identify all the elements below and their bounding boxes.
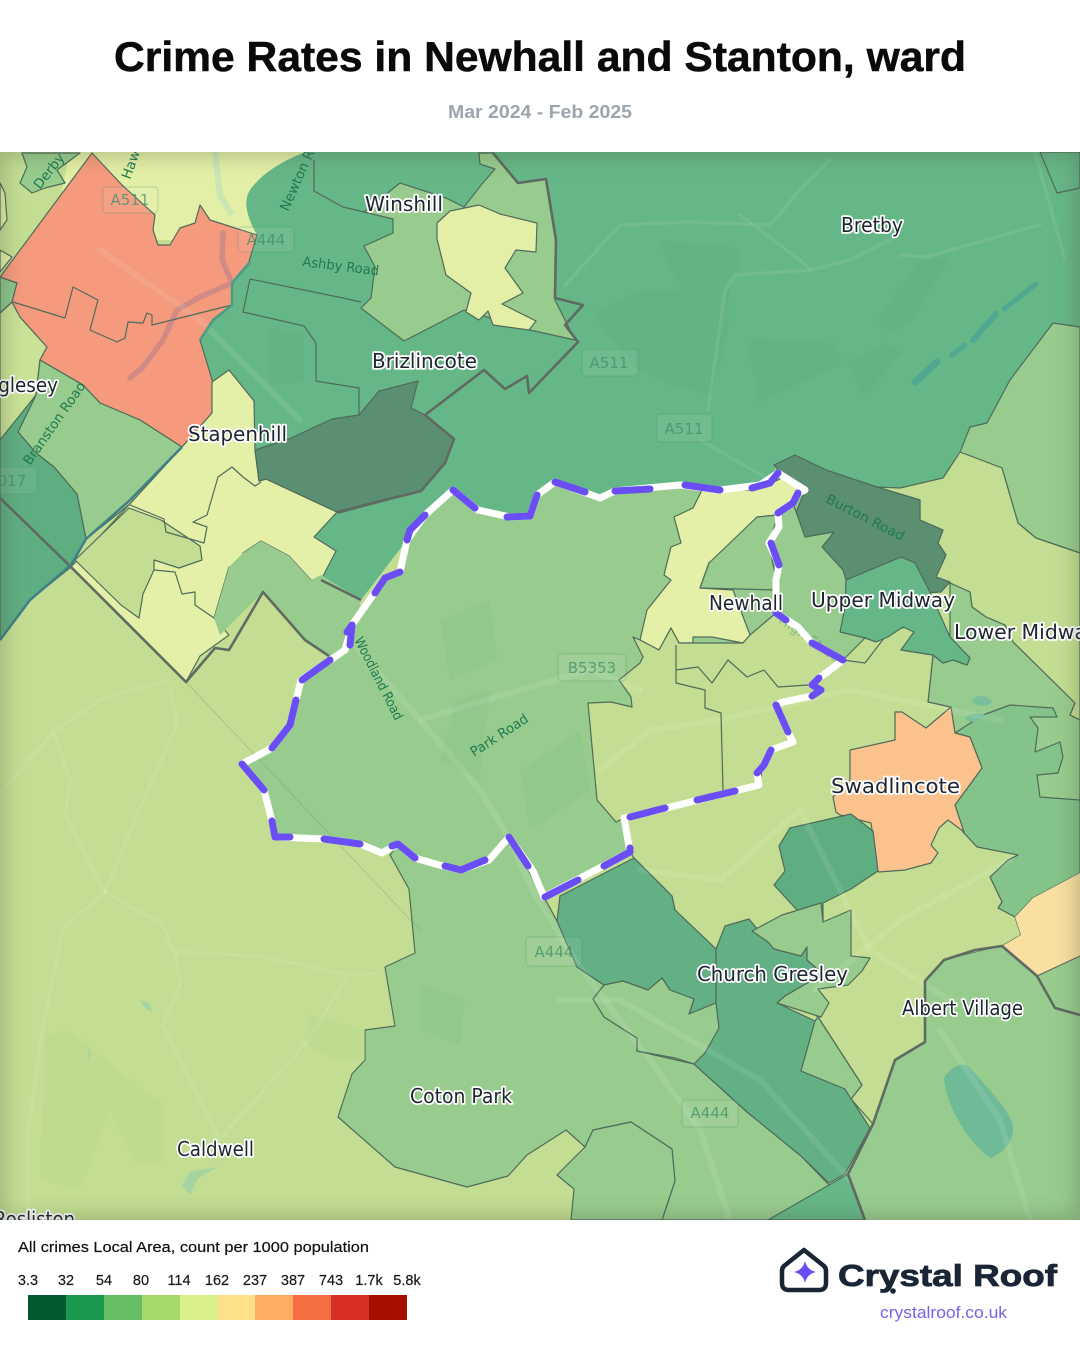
road numbers: A511 [665,420,703,438]
area: Coton south patch [557,1122,675,1220]
area: Burton salmon [0,153,257,447]
water: ponds [88,696,992,1195]
area: east pale [877,452,1080,720]
area: left small green [0,277,17,313]
place labels [0,192,1080,1231]
area: Swadlincote dark green [774,814,878,922]
area: Newhall west inset [700,515,778,590]
area: Swadlincote tan [833,707,982,872]
area: left of ward medium [214,541,361,656]
area: Upper Midway green [840,557,970,665]
area: top-right corner [1040,152,1080,193]
area: east darker medium [955,705,1080,917]
area: Church Gresley green [694,919,870,1183]
road names: Derby [31,150,68,192]
forest tint patches on strong green [268,240,950,403]
legend scale values: 80 [133,1273,149,1289]
area: Bretby and Winshill high-green [200,152,1080,600]
place labels: Church Gresley [697,962,848,986]
road names: Hawk [119,141,147,181]
icon: Crystal Roof house logo [782,1250,826,1290]
legend scale values: 162 [205,1273,229,1289]
road numbers: A511 [590,354,628,372]
area: Coton Park [338,837,829,1220]
area: ward south-east pale [588,613,843,822]
road names [20,125,907,760]
road names: Burton Road [823,491,907,545]
river [0,447,182,640]
legend scale values: 32 [58,1273,74,1289]
area: ward east medium inset [769,503,865,660]
road numbers: A444 [247,231,285,249]
road numbers: A444 [535,943,573,961]
place labels: Coton Park [410,1084,512,1108]
legend scale values: 237 [243,1273,267,1289]
area: left pale patch one [0,183,7,230]
legend scale values: 743 [319,1273,343,1289]
road numbers [0,191,729,1122]
legend title: All crimes Local Area, count per 1000 population [18,1239,369,1256]
area: west strip green [0,395,86,640]
area: Gresley west green [557,858,716,1014]
area: Swadlincote big pale [624,627,1021,1124]
subtitle: date range: Mar 2024 - Feb 2025 [448,101,632,122]
area: ward base [242,472,843,897]
water: salmon-area river [130,233,232,378]
area: top pale yellow [60,152,305,240]
water: reservoir [944,1065,1013,1158]
roads [0,152,1065,1220]
ward boundary: purple dashes [242,473,843,897]
place labels: Bretby [841,213,903,237]
legend colour bar [28,1295,407,1320]
area: Winshill yellow patch [437,205,537,330]
legend scale values: 1.7k [355,1273,383,1289]
brand name: Crystal Roof [838,1258,1058,1293]
place labels: Winshill [365,192,443,216]
area: east medium [928,582,1080,800]
road names: Woodland Road [350,635,406,723]
area: Stapenhill yellow [71,370,337,682]
legend scale values: 5.8k [393,1273,421,1289]
road badges [0,187,738,1127]
pale area tint patches [40,1015,365,1190]
road names: Ashby Road [302,254,380,279]
area: Albert Village south-east [848,946,1080,1220]
area: left pale strip [0,302,47,440]
brand url: crystalroof.co.uk [880,1304,1008,1322]
road names: Newton Road [277,125,328,214]
area: left pale patch two [0,250,12,272]
area: far east green [1037,956,1080,1015]
place labels: Upper Midway [811,588,955,612]
place labels: Brizlincote [372,349,477,373]
road names: High Street [776,612,847,669]
inner lines [13,160,808,790]
area: top right medium [960,323,1080,553]
district boundaries [0,153,1080,1220]
area: Gresley light patch [752,903,870,1017]
area: Brizlincote dark [255,381,454,513]
place labels: Albert Village [902,996,1023,1020]
legend scale values: 387 [281,1273,305,1289]
ward boundary: white underlay [242,473,843,897]
legend scale values [18,1273,421,1289]
place labels: Stapenhill [188,422,287,446]
area: Winshill light green [361,153,575,341]
area: Gresley inner patch [593,978,722,1064]
area: Burton Road dark [774,455,950,593]
legend scale values: 3.3 [18,1273,38,1289]
area: Stapenhill pale patch [75,508,202,618]
area: Gresley east medium [801,1017,862,1099]
road numbers: A511 [111,191,149,209]
area: top-left green [20,153,80,193]
area: Newhall pale yellow [640,477,805,650]
place labels: Swadlincote [831,774,960,798]
road names: Park Road [467,711,532,760]
road numbers: B5353 [568,659,616,677]
water: pale river top [215,152,232,215]
area: Branston medium [18,360,182,539]
road numbers: A444 [691,1104,729,1122]
road names: Branston Road [20,379,89,468]
area: east tan [1002,873,1080,976]
place labels: Caldwell [177,1137,254,1161]
title: Crime Rates in Newhall and Stanton, ward [114,33,966,80]
water: stream top right [915,284,1036,382]
area: south strong patch [768,1174,865,1220]
river upper teal edge [200,262,250,340]
legend scale values: 54 [96,1273,112,1289]
forest tint patches on medium green [420,600,590,1045]
place labels: Newhall [709,591,783,615]
legend scale values: 114 [167,1273,191,1289]
